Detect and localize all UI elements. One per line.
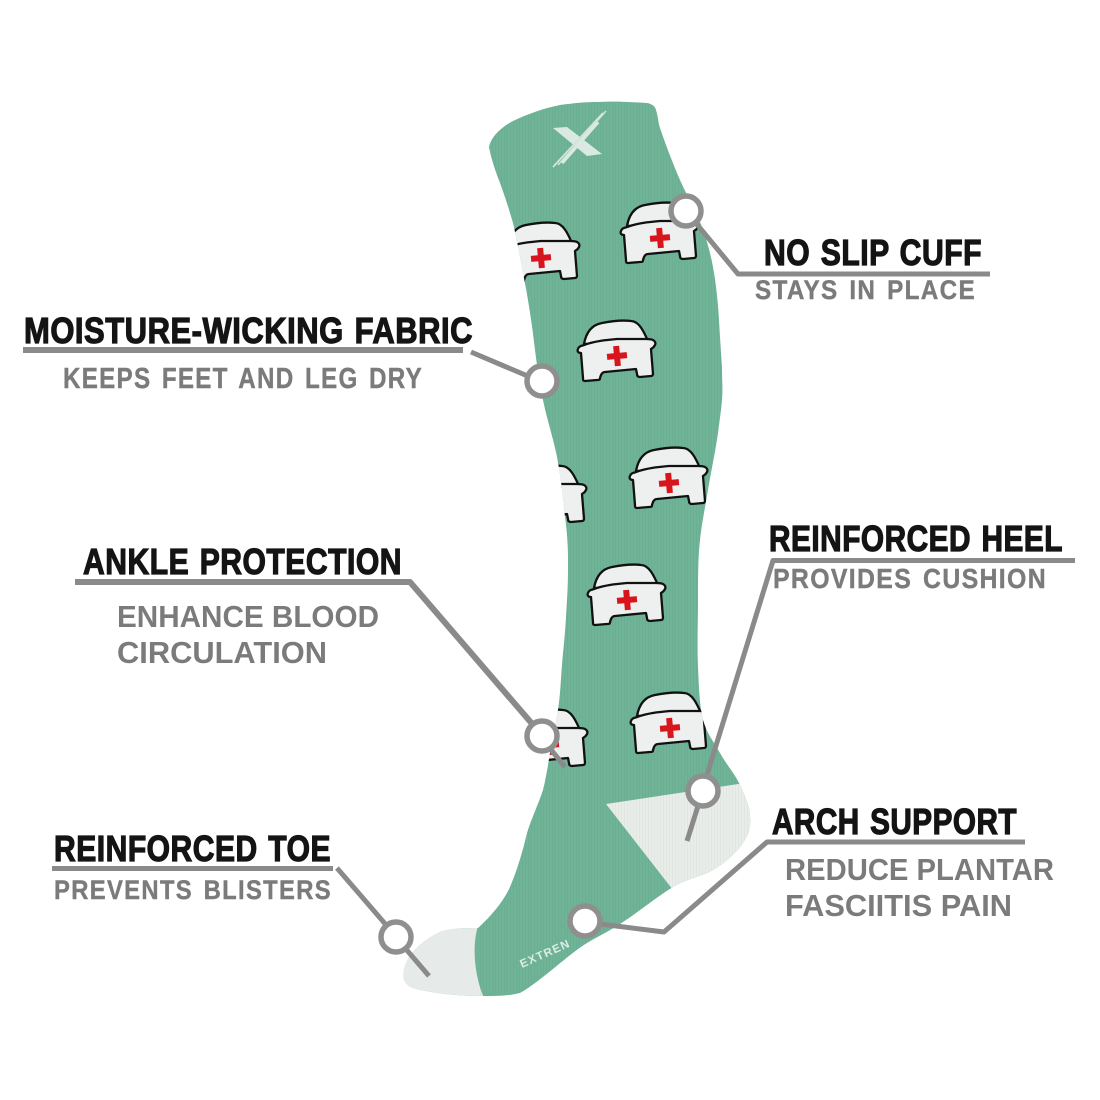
callout: reinforced toe: REINFORCED TOE: [54, 828, 331, 869]
callout: moisture-wicking fabric: MOISTURE-WICKING FABRIC: [24, 310, 473, 351]
callout: ankle protection: ANKLE PROTECTION: [83, 541, 402, 582]
knit texture: [480, 95, 760, 1000]
sock body: [403, 102, 750, 996]
callout: moisture-wicking fabric: [23, 310, 557, 396]
callout: moisture-wicking fabric: KEEPS FEET AND LEG DRY: [63, 363, 423, 395]
cars pattern: [502, 203, 708, 770]
callout: arch support: FASCIITIS PAIN: [785, 888, 1012, 923]
callout: reinforced toe: [52, 828, 429, 976]
brand text on sole: EXTREN: [518, 938, 572, 971]
car icon: [630, 448, 707, 508]
logo: X mark: [553, 111, 606, 167]
callout: reinforced heel: PROVIDES CUSHION: [773, 563, 1047, 594]
callout: reinforced heel: [687, 518, 1075, 841]
callout: arch support: ARCH SUPPORT: [772, 801, 1017, 842]
callout: ankle protection: CIRCULATION: [117, 635, 327, 670]
callout: arch support: [570, 801, 1054, 936]
car icon: [514, 221, 581, 282]
car icon: [578, 321, 655, 381]
car icon: [631, 693, 708, 753]
callout: no slip cuff: [671, 196, 990, 305]
compression sock: [395, 95, 765, 1000]
toe patch: [404, 928, 484, 996]
callout: no slip cuff: NO SLIP CUFF: [764, 232, 982, 273]
callout: arch support: REDUCE PLANTAR: [785, 852, 1054, 887]
callout: ankle protection: ENHANCE BLOOD: [117, 599, 379, 634]
car icon: [621, 203, 698, 263]
car icon: [558, 464, 588, 524]
callout: no slip cuff: STAYS IN PLACE: [755, 275, 976, 305]
car icon: [548, 708, 589, 768]
callout: reinforced toe: PREVENTS BLISTERS: [54, 875, 332, 905]
car icon: [588, 565, 665, 625]
heel patch: [606, 784, 750, 888]
callout: ankle protection: [75, 541, 565, 767]
